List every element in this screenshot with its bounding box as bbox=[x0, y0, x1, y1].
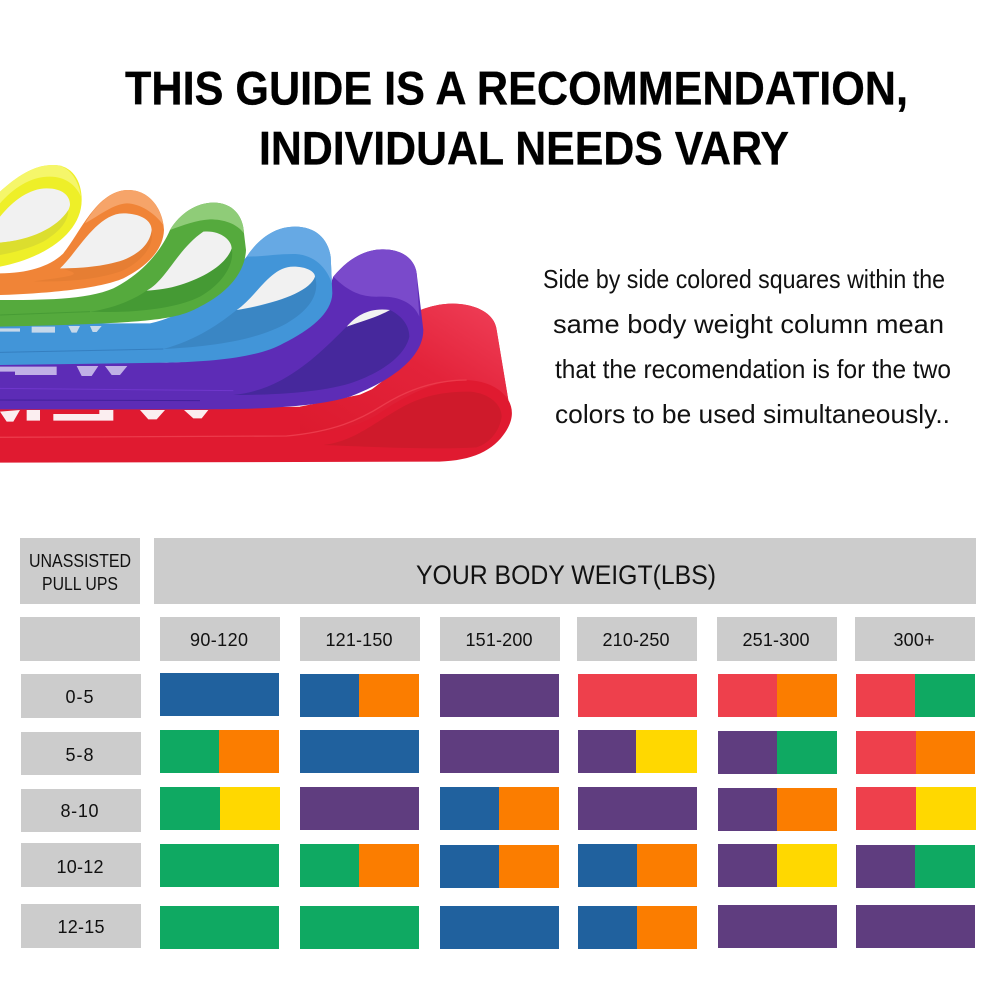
illustration: stacked resistance bands bbox=[0, 165, 512, 463]
yellow band bbox=[0, 165, 82, 267]
title: INDIVIDUAL NEEDS VARY bbox=[259, 122, 789, 174]
header: unassisted pull ups: UNASSISTED bbox=[29, 551, 131, 571]
row 5-8 colour cells bbox=[160, 730, 975, 774]
red band bbox=[0, 304, 512, 463]
blank header cell bbox=[20, 617, 140, 661]
row label 0-5 bbox=[21, 674, 141, 718]
weight 151-200: 151-200 bbox=[466, 630, 532, 650]
row label 5-8 bbox=[21, 732, 141, 775]
row label 10-12 bbox=[21, 843, 141, 887]
row label 8-10 bbox=[21, 789, 141, 832]
green band bbox=[0, 203, 246, 327]
weight 121-150: 121-150 bbox=[326, 630, 392, 650]
row label 12-15: 12-15 bbox=[58, 917, 104, 937]
row label 8-10: 8-10 bbox=[60, 801, 98, 821]
weight 300+ bbox=[855, 617, 975, 661]
explanation text block: same body weight column mean bbox=[553, 309, 944, 339]
purple band bbox=[0, 249, 423, 409]
weight 251-300 bbox=[717, 617, 837, 661]
weight 300+: 300+ bbox=[894, 630, 934, 650]
header: your body weight bbox=[154, 538, 976, 604]
row 8-10 colour cells bbox=[160, 787, 976, 831]
row 0-5 colour cells bbox=[160, 673, 975, 717]
blue band bbox=[0, 227, 332, 365]
explanation text block bbox=[543, 264, 951, 429]
header: your body weight: YOUR BODY WEIGT(LBS) bbox=[416, 560, 716, 590]
row label 10-12: 10-12 bbox=[56, 857, 104, 877]
table: pull-up recommendations bbox=[20, 538, 976, 949]
weight 151-200 bbox=[440, 617, 560, 661]
weight 121-150 bbox=[300, 617, 420, 661]
weight 90-120: 90-120 bbox=[190, 630, 248, 650]
header: unassisted pull ups: PULL UPS bbox=[42, 574, 118, 594]
header: unassisted pull ups bbox=[20, 538, 140, 604]
row 10-12 colour cells bbox=[160, 844, 975, 888]
row label 0-5: 0-5 bbox=[66, 687, 94, 707]
row label 5-8: 5-8 bbox=[66, 745, 94, 765]
title bbox=[125, 62, 908, 174]
weight 210-250 bbox=[577, 617, 697, 661]
explanation text block: Side by side colored squares within the bbox=[543, 264, 945, 294]
explanation text block: that the recomendation is for the two bbox=[555, 354, 951, 384]
row label 12-15 bbox=[21, 904, 141, 948]
weight 210-250: 210-250 bbox=[602, 630, 670, 650]
orange band bbox=[0, 190, 164, 295]
explanation text block: colors to be used simultaneously.. bbox=[555, 399, 950, 429]
weight 90-120 bbox=[160, 617, 280, 661]
weight 251-300: 251-300 bbox=[742, 630, 810, 650]
row 12-15 colour cells bbox=[160, 905, 975, 949]
title: THIS GUIDE IS A RECOMMENDATION, bbox=[125, 62, 908, 114]
